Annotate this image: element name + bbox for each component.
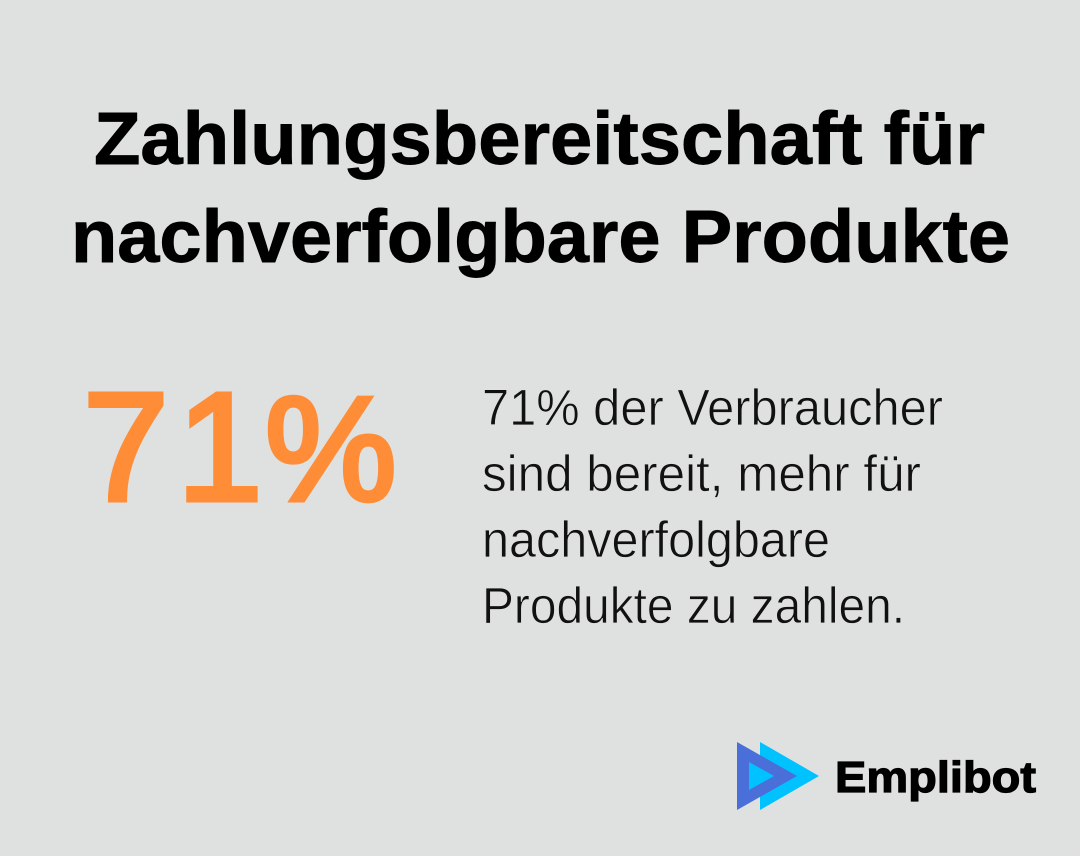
logo: Emplibot — [737, 742, 1036, 810]
statistic description: 71% der Verbraucher — [482, 379, 943, 436]
title: Zahlungsbereitschaft für — [94, 97, 985, 180]
title — [71, 97, 1010, 278]
big statistic: 71%: 7 — [83, 361, 169, 533]
logo wordmark: Emplibot — [835, 753, 1036, 802]
title: nachverfolgbare Produkte — [71, 195, 1010, 278]
statistic description: sind bereit, mehr für — [482, 445, 921, 502]
big statistic: 71%: 1 — [177, 361, 263, 533]
statistic description — [482, 379, 943, 634]
statistic description: nachverfolgbare — [482, 511, 830, 568]
big statistic: 71%: % — [265, 367, 397, 532]
statistic description: Produkte zu zahlen. — [482, 577, 905, 634]
icon: play triangles — [737, 742, 819, 810]
